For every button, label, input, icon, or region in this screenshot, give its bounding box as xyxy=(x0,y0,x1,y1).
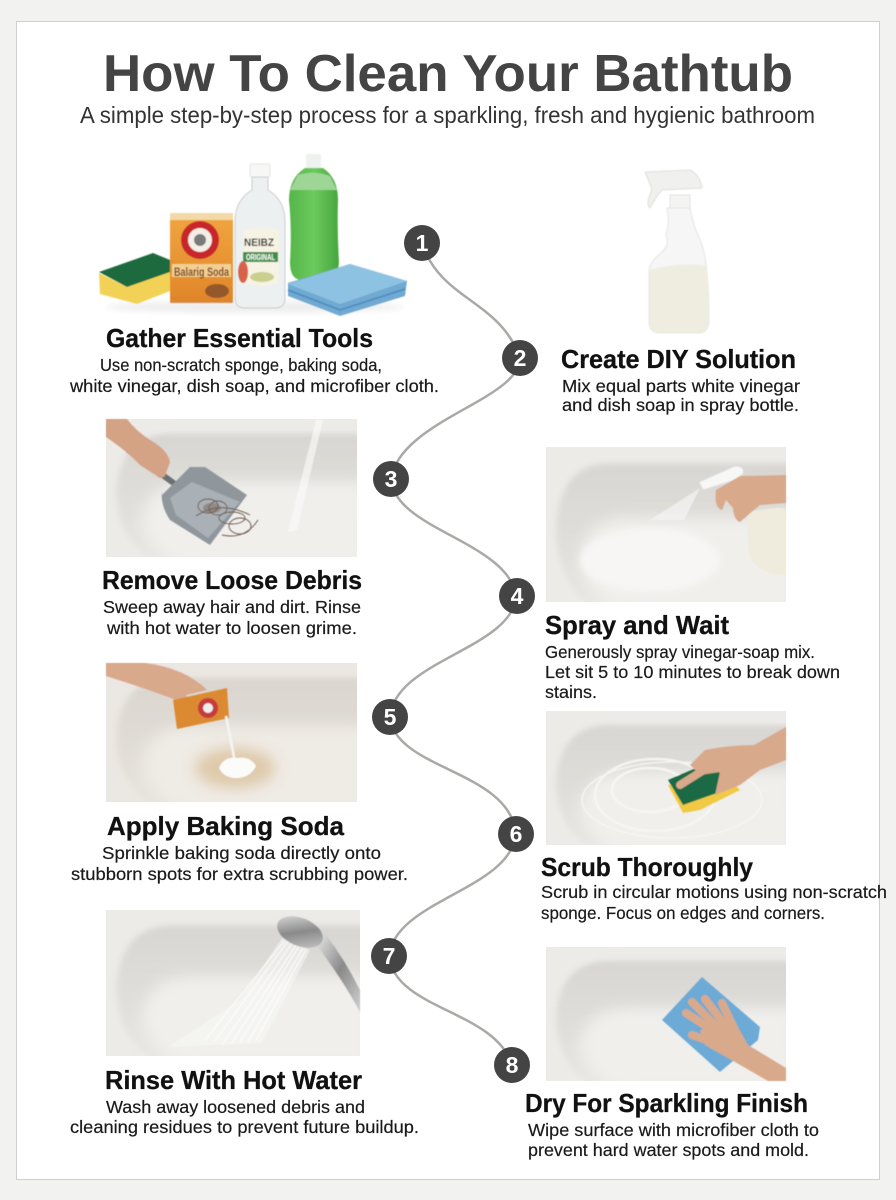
icon: dish soap bottle xyxy=(289,154,339,280)
photo: drying with microfiber cloth xyxy=(546,947,796,1090)
step 4 badge xyxy=(499,578,535,614)
step 2 text: and dish soap in spray bottle. xyxy=(562,395,799,415)
step 5 text xyxy=(71,811,408,884)
step 6 text xyxy=(541,852,887,923)
image: cleaning supplies xyxy=(99,154,407,316)
icon: vinegar bottle xyxy=(235,164,285,308)
step 3 badge: 3 xyxy=(385,466,397,492)
step 8 text: Dry For Sparkling Finish xyxy=(525,1088,808,1118)
step 2 badge: 2 xyxy=(514,345,526,371)
step 3 text xyxy=(102,565,362,638)
subtitle: A simple step-by-step process for a sparkling, fresh and hygienic bathroom xyxy=(80,102,815,128)
step 7 text: cleaning residues to prevent future buildup. xyxy=(70,1117,419,1137)
title: How To Clean Your Bathtub xyxy=(103,45,793,103)
step 4 text: Spray and Wait xyxy=(545,610,729,640)
step 8 badge xyxy=(494,1047,530,1083)
step 4 badge: 4 xyxy=(511,583,524,609)
step 1 badge: 1 xyxy=(416,230,429,256)
step 1 text: Gather Essential Tools xyxy=(106,323,373,353)
photo: spraying the tub xyxy=(546,447,796,612)
icon: baking soda box: Balarig Soda xyxy=(174,265,229,279)
icon: sponge xyxy=(99,253,170,304)
step 3 text: Remove Loose Debris xyxy=(102,565,362,595)
step 7 text: Wash away loosened debris and xyxy=(106,1097,365,1117)
step 7 text: Rinse With Hot Water xyxy=(105,1065,362,1095)
step 7 badge xyxy=(371,938,407,974)
step 5 text: Apply Baking Soda xyxy=(107,811,345,841)
step 6 badge xyxy=(498,816,534,852)
step 2 text: Create DIY Solution xyxy=(561,344,796,374)
icon: microfiber cloth xyxy=(288,264,407,316)
step 4 text: Generously spray vinegar-soap mix. xyxy=(545,642,815,662)
step 7 text xyxy=(70,1065,419,1137)
step 5 text: stubborn spots for extra scrubbing power. xyxy=(71,864,408,884)
step 8 text: prevent hard water spots and mold. xyxy=(528,1140,809,1160)
step 8 badge: 8 xyxy=(506,1052,519,1078)
photo: applying baking soda xyxy=(106,663,367,811)
step 3 text: Sweep away hair and dirt. Rinse xyxy=(103,597,361,617)
image: spray bottle xyxy=(645,170,709,333)
step 4 text: Let sit 5 to 10 minutes to break down xyxy=(545,662,840,682)
step 2 text: Mix equal parts white vinegar xyxy=(562,376,800,396)
step 6 text: Scrub Thoroughly xyxy=(541,852,754,882)
connector curve xyxy=(389,243,520,1065)
photo: removing debris with dustpan xyxy=(106,419,367,566)
step 1 text xyxy=(69,323,439,396)
photo: scrubbing with sponge xyxy=(546,711,796,854)
step 6 text: sponge. Focus on edges and corners. xyxy=(541,903,825,923)
step 5 badge: 5 xyxy=(384,704,397,730)
icon: vinegar bottle: NEIBZ xyxy=(244,237,274,249)
step 4 text: stains. xyxy=(545,682,597,702)
step 1 text: white vinegar, dish soap, and microfiber cloth. xyxy=(69,376,439,396)
step 8 text xyxy=(525,1088,819,1160)
step 1 badge xyxy=(404,225,440,261)
step 2 text xyxy=(561,344,800,415)
step 4 text xyxy=(545,610,840,702)
step 1 text: Use non-scratch sponge, baking soda, xyxy=(100,355,382,375)
step 2 badge xyxy=(502,340,538,376)
step 5 badge xyxy=(372,699,408,735)
icon: baking soda box xyxy=(170,213,233,303)
step 3 text: with hot water to loosen grime. xyxy=(106,618,357,638)
step 6 text: Scrub in circular motions using non-scratch xyxy=(541,882,887,902)
step 6 badge: 6 xyxy=(510,821,522,847)
icon: vinegar bottle: ORIGINAL xyxy=(246,253,275,262)
step 8 text: Wipe surface with microfiber cloth to xyxy=(528,1120,819,1140)
photo: rinsing with shower head xyxy=(106,910,371,1066)
step 7 badge: 7 xyxy=(383,943,395,969)
step 5 text: Sprinkle baking soda directly onto xyxy=(102,843,381,863)
step 3 badge xyxy=(373,461,409,497)
